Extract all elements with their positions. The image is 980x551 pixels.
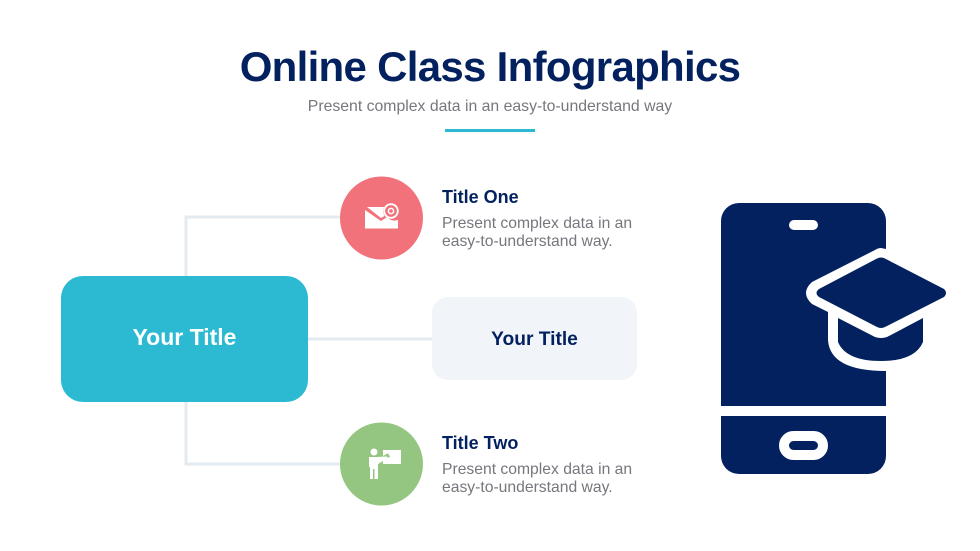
icon: teacher circle	[340, 422, 423, 506]
heading: title two: Title Two	[442, 433, 518, 453]
subtitle: Present complex data in an easy-to-understand way	[308, 98, 672, 115]
text: title one description: Present complex data in an easy-to-understand way.	[442, 215, 632, 250]
block: title one	[442, 187, 632, 250]
text: title two description: Present complex data in an easy-to-understand way.	[442, 461, 632, 496]
title: Online Class Infographics	[240, 43, 740, 90]
icon: phone with graduation cap	[721, 203, 946, 474]
secondary box: your title: Your Title	[491, 329, 578, 350]
icon: email circle	[340, 176, 423, 260]
heading: title one: Title One	[442, 187, 519, 207]
secondary box: your title	[432, 297, 637, 380]
main box: your title	[61, 276, 308, 402]
block: title two	[442, 433, 632, 496]
title underline	[445, 129, 535, 132]
main box: your title: Your Title	[133, 324, 236, 350]
